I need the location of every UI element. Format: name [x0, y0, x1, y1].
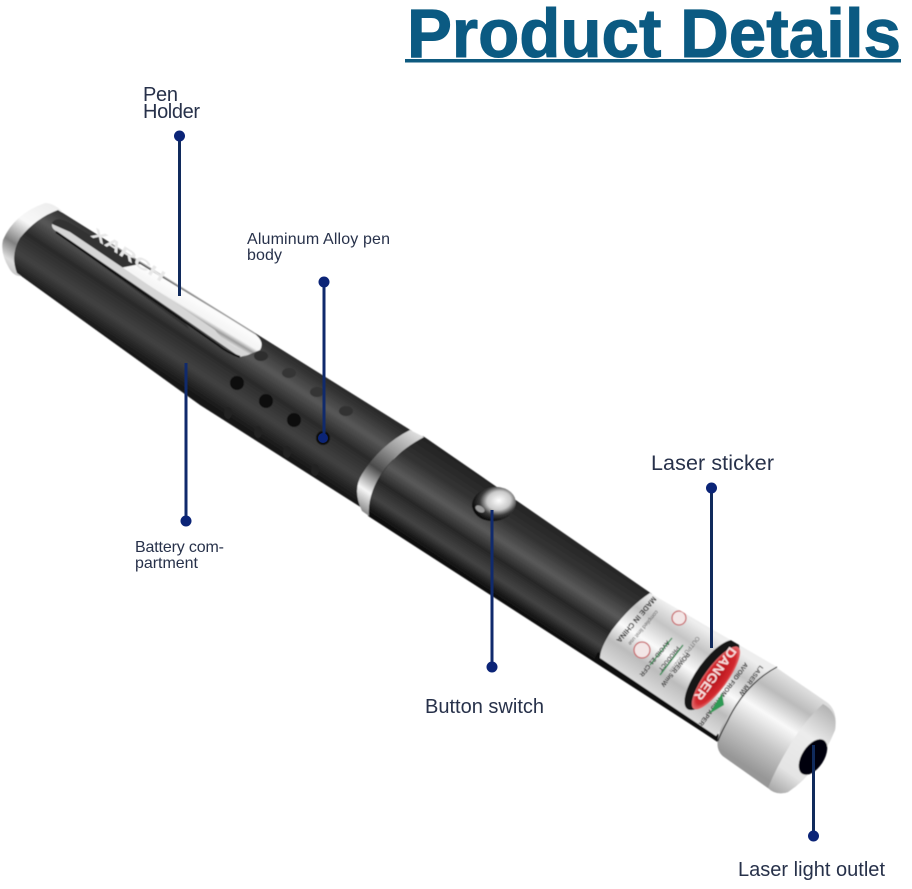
silver head: [717, 668, 836, 793]
laser warning sticker: OUTPUT 532nm: [667, 635, 700, 673]
danger label: [684, 640, 740, 711]
laser warning sticker: DANGER: [691, 644, 740, 704]
label: pen holder: [143, 84, 200, 296]
end ring of pen: [2, 203, 62, 276]
pocket clip: [52, 219, 262, 357]
label: pen holder: Pen: [143, 84, 178, 106]
front barrel: [368, 436, 718, 742]
green arrow mark: [709, 693, 724, 714]
laser warning sticker: AVOID 21 CFR: [637, 639, 671, 678]
laser warning sticker: PRODUCT: [657, 645, 680, 672]
label: battery compartment: [135, 363, 224, 572]
label: aluminum alloy pen body: body: [247, 247, 282, 264]
label: laser light outlet: [738, 745, 885, 881]
label: pen holder: Holder: [143, 101, 200, 123]
vent holes: [224, 351, 353, 476]
label: laser sticker: [651, 451, 774, 648]
label: battery compartment: Battery com-: [135, 539, 224, 556]
label: aluminum alloy pen body: [247, 231, 390, 443]
laser aperture: [793, 734, 833, 780]
label: button switch: [425, 510, 544, 718]
metal collar ring: [357, 430, 424, 516]
laser warning sticker: [600, 593, 777, 741]
label: laser sticker: Laser sticker: [651, 451, 774, 475]
label: laser light outlet: Laser light outlet: [738, 859, 885, 881]
label: battery compartment: partment: [135, 555, 199, 572]
head edge line: [718, 667, 777, 741]
pocket clip: XARCH: [88, 225, 168, 286]
laser warning sticker: POWER 5mW: [659, 651, 691, 688]
label: button switch: Button switch: [425, 696, 544, 718]
label: aluminum alloy pen body: Aluminum Alloy pen: [247, 231, 390, 248]
rear battery barrel: [14, 210, 412, 508]
button switch: [470, 484, 518, 524]
laser warning sticker: complied limit use: [626, 609, 659, 646]
warning circles: [634, 642, 650, 658]
black strip below sticker: [594, 652, 722, 745]
sticker fine print: MADE IN CHINA: [614, 595, 658, 645]
head front face: [768, 704, 836, 793]
laser pen illustration: [2, 203, 836, 793]
laser warning sticker: LASER MW: [737, 664, 764, 697]
laser warning sticker: AVOID FROM THIS APERTURE: [686, 661, 749, 741]
